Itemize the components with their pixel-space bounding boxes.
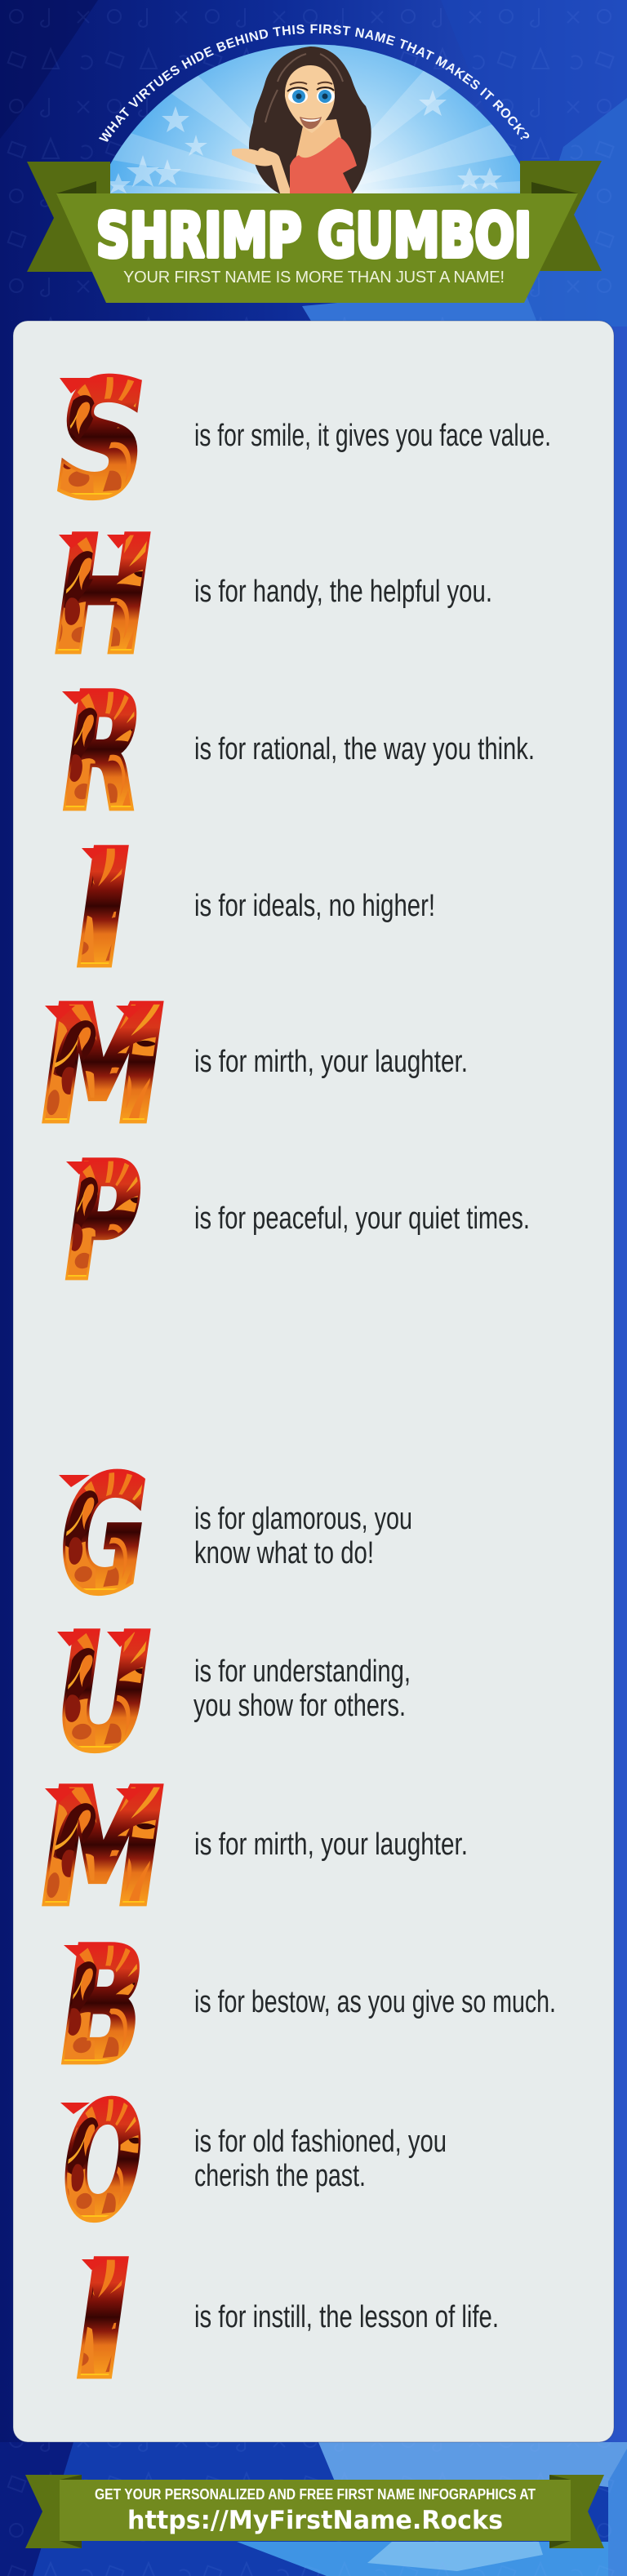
letter G: G xyxy=(48,1443,158,1628)
text I: is for ideals, no higher! xyxy=(194,889,435,923)
letter S: S xyxy=(44,349,158,533)
letter O: O xyxy=(51,2070,154,2254)
footer ribbon band xyxy=(60,2480,571,2541)
letter R xyxy=(62,688,137,811)
letter U: U xyxy=(44,1601,162,1786)
letter B: B xyxy=(49,1915,156,2099)
text G: know what to do! xyxy=(194,1536,374,1570)
letter O xyxy=(60,2096,140,2223)
arched tagline: WHAT VIRTUES HIDE BEHIND THIS FIRST NAME THAT MAKES IT ROCK? xyxy=(99,24,529,142)
arm and hand xyxy=(232,148,291,193)
letter R: R xyxy=(51,662,153,845)
text U: you show for others. xyxy=(193,1689,406,1723)
letter I second xyxy=(77,2256,129,2378)
letter I second: I xyxy=(61,2228,143,2413)
letter S xyxy=(57,374,142,501)
letter H xyxy=(55,531,151,655)
letter M xyxy=(42,1001,164,1123)
hair xyxy=(249,47,371,193)
footer ribbon left tail xyxy=(25,2475,82,2548)
shirt xyxy=(290,137,357,193)
ribbon right tail xyxy=(520,161,602,271)
neck xyxy=(296,119,341,163)
footer call to action: GET YOUR PERSONALIZED AND FREE FIRST NAME INFOGRAPHICS AT xyxy=(95,2486,536,2503)
letter G xyxy=(59,1469,145,1597)
letter M: M xyxy=(29,974,176,1158)
text I second: is for instill, the lesson of life. xyxy=(194,2300,499,2334)
woman character xyxy=(232,47,371,193)
face xyxy=(285,65,335,133)
letter M second: M xyxy=(29,1757,176,1941)
text U xyxy=(193,1654,411,1723)
text O: cherish the past. xyxy=(194,2159,366,2193)
text G xyxy=(194,1502,412,1570)
footer url: https://MyFirstName.Rocks xyxy=(127,2506,503,2535)
text R: is for rational, the way you think. xyxy=(194,732,535,766)
text H: is for handy, the helpful you. xyxy=(194,575,492,609)
ribbon front xyxy=(56,193,578,303)
header ribbon xyxy=(27,161,602,303)
letter I: I xyxy=(61,817,143,1002)
text P: is for peaceful, your quiet times. xyxy=(194,1201,530,1236)
letter P xyxy=(65,1157,140,1280)
text O xyxy=(194,2125,447,2193)
footer ribbon right tail xyxy=(549,2475,604,2548)
letter P: P xyxy=(53,1130,151,1315)
text G: is for glamorous, you xyxy=(194,1502,412,1536)
main panel xyxy=(13,321,614,2442)
letter M second xyxy=(42,1783,164,1907)
letter H: H xyxy=(42,504,162,688)
letter I xyxy=(77,845,129,968)
text U: is for understanding, xyxy=(194,1654,411,1689)
footer ribbon xyxy=(25,2475,604,2548)
text M: is for mirth, your laughter. xyxy=(194,1045,468,1079)
ribbon left tail xyxy=(27,162,110,272)
subtitle: YOUR FIRST NAME IS MORE THAN JUST A NAME! xyxy=(123,269,505,286)
letter U xyxy=(57,1628,151,1753)
header dome xyxy=(110,44,520,193)
letter B xyxy=(60,1942,140,2065)
mouth xyxy=(300,117,322,129)
text O: is for old fashioned, you xyxy=(194,2125,447,2159)
text M second: is for mirth, your laughter. xyxy=(194,1828,468,1862)
eyes xyxy=(287,82,335,104)
